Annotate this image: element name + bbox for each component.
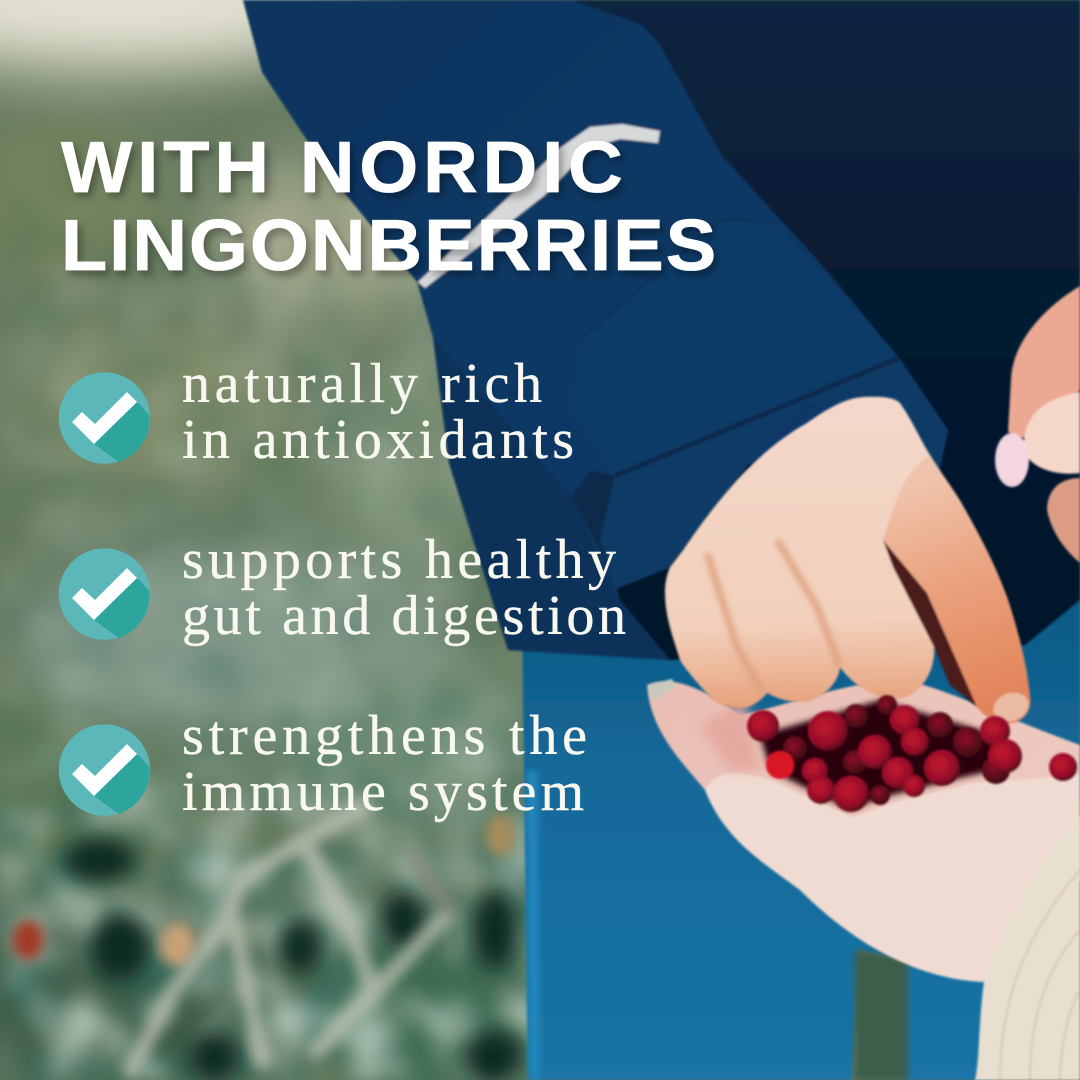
benefit text 1: naturally rich xyxy=(182,353,542,415)
sleeve xyxy=(243,0,948,589)
benefit text 2 xyxy=(182,529,626,647)
jacket body xyxy=(433,0,1080,660)
benefit text 1: in antioxidants xyxy=(182,409,574,471)
blurred meadow xyxy=(0,0,560,1080)
gap between fingers xyxy=(883,540,977,707)
adult upper hand with pill xyxy=(995,286,1080,563)
benefit text 3 xyxy=(182,705,587,823)
finger separations xyxy=(707,540,840,693)
blurred berries in the meadow xyxy=(12,813,514,967)
benefit text 3: immune system xyxy=(182,761,584,823)
reflective stripe xyxy=(418,124,660,288)
knit sweater sleeve xyxy=(975,815,1080,1080)
check icon 1 xyxy=(59,372,150,464)
navy jacket xyxy=(243,0,1080,660)
lower finger xyxy=(1047,478,1080,563)
benefit 3 xyxy=(59,705,587,823)
child hand xyxy=(665,397,1033,726)
upper finger xyxy=(1008,286,1080,440)
hand shape xyxy=(665,397,1030,724)
adult lower hand xyxy=(647,679,1080,982)
jeans xyxy=(522,600,1080,1080)
pill xyxy=(995,433,1029,487)
cuff xyxy=(621,410,948,587)
sleeve pocket flap xyxy=(567,219,899,476)
benefit 2 xyxy=(59,529,626,647)
benefit text 1 xyxy=(182,353,574,471)
palm and fingers xyxy=(647,680,1080,982)
benefit text 3: strengthens the xyxy=(182,705,587,767)
title xyxy=(61,127,716,286)
index finger xyxy=(883,455,1030,724)
title line 2: LINGONBERRIES xyxy=(61,205,716,286)
thumb xyxy=(1024,392,1080,474)
benefit text 2: gut and digestion xyxy=(182,585,626,647)
check icon 3 xyxy=(59,724,150,816)
nail xyxy=(992,691,1030,723)
lingonberries xyxy=(747,695,1077,812)
lower sleeve shadow xyxy=(433,337,670,660)
blurred pale grass stalks xyxy=(131,807,448,1070)
benefit 1 xyxy=(59,353,574,471)
mottled foliage xyxy=(0,192,528,1080)
dark foliage gaps xyxy=(64,838,523,1080)
benefit text 2: supports healthy xyxy=(182,529,616,591)
check icon 2 xyxy=(59,548,150,640)
title line 1: WITH NORDIC xyxy=(61,127,623,208)
